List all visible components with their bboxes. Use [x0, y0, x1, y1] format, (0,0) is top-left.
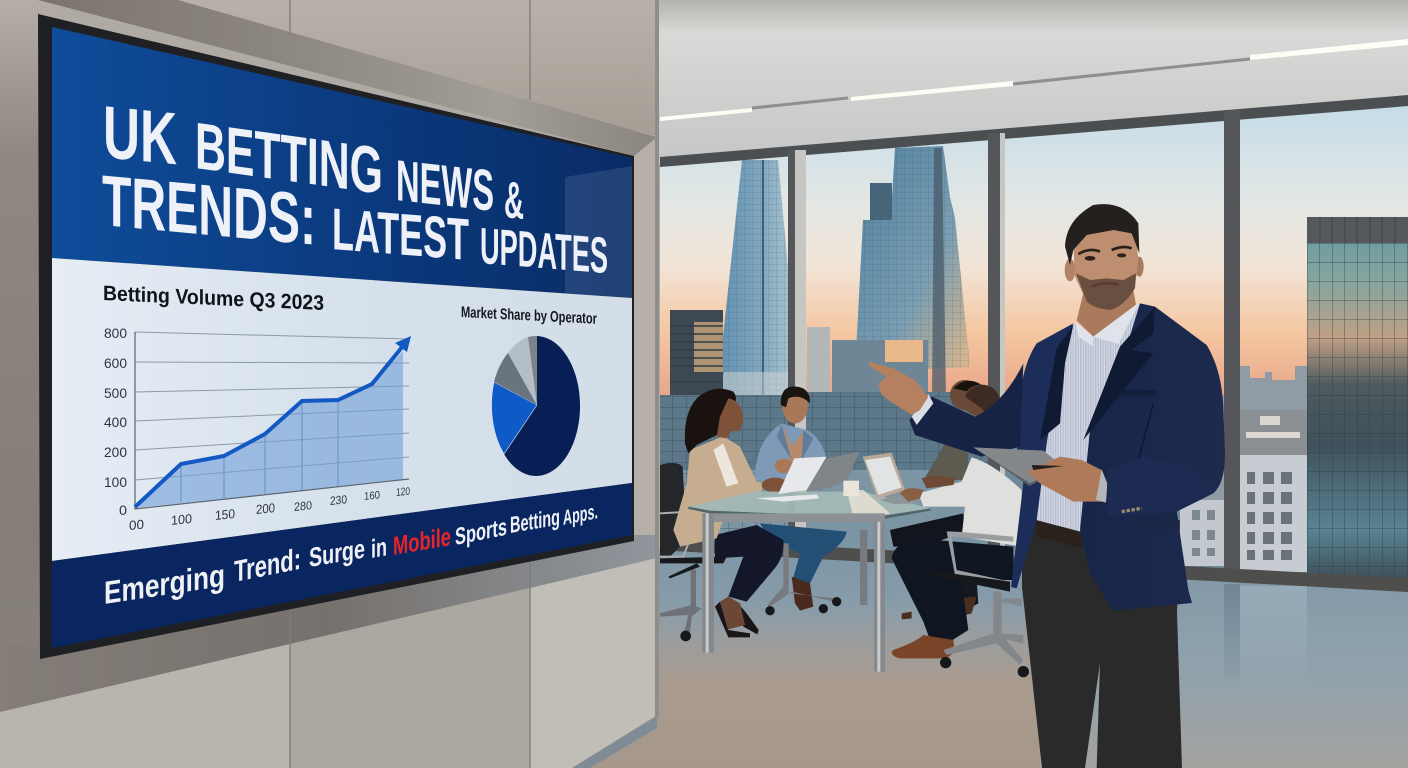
- title: NEWS: [396, 148, 494, 224]
- chart heading: betting volume: Betting Volume Q3 2023: [103, 282, 324, 315]
- mid-rise city blocks: [660, 392, 988, 480]
- far left wall in shadow: [0, 0, 60, 768]
- white building: [1240, 455, 1307, 572]
- office chair: left black: [660, 463, 727, 641]
- area under line: [135, 351, 403, 508]
- pointing arm: [909, 363, 1023, 457]
- arrow head: [395, 336, 411, 352]
- trend line: [135, 346, 403, 507]
- shirt: [1036, 303, 1155, 532]
- second woman seated: blue blazer: [755, 387, 847, 615]
- lower metal strip: [0, 535, 657, 712]
- ticker text: Apps.: [563, 500, 598, 530]
- x axis labels: 280: [294, 498, 312, 514]
- hand: [762, 478, 788, 492]
- x axis labels: 120: [396, 486, 410, 499]
- peach block and low glass front: [807, 327, 830, 397]
- ceiling: [640, 0, 1408, 165]
- document sheets: [755, 457, 827, 502]
- ticker band: [52, 483, 632, 648]
- chart area: [52, 258, 632, 561]
- chair base: [767, 543, 837, 607]
- hand with paper: [775, 459, 793, 473]
- line chart: betting volume: [104, 325, 411, 533]
- shirt cuff: [912, 394, 933, 425]
- ticker text: Trend:: [234, 543, 301, 589]
- laptop: grey open: [806, 452, 859, 491]
- ticker text: [104, 500, 598, 611]
- ticker text: Surge: [309, 533, 365, 573]
- distant haze buildings right: [1240, 366, 1307, 455]
- window frame mullions: [660, 95, 1408, 593]
- y axis labels: 800: [104, 325, 127, 341]
- lower panels: [0, 644, 290, 768]
- neck: [1077, 290, 1136, 337]
- title: LATEST: [332, 196, 469, 273]
- ticker text: Sports: [455, 514, 507, 551]
- blazer: [673, 436, 763, 547]
- presenter: [868, 204, 1225, 768]
- seated man upper body: [900, 385, 1022, 547]
- ticker text: Emerging: [104, 557, 225, 611]
- trousers: [715, 525, 784, 602]
- distant skyline: [660, 395, 1408, 590]
- pointing hand: [868, 362, 928, 415]
- right wall column: [630, 130, 657, 560]
- y axis labels: 600: [104, 355, 127, 371]
- upper metal strip: [38, 0, 657, 156]
- first woman seated: beige blazer: [673, 389, 788, 637]
- x axis labels: [129, 486, 410, 533]
- left wall with panels: [0, 0, 659, 768]
- x axis labels: 00: [129, 517, 144, 533]
- ticker text: Betting: [510, 504, 560, 538]
- meeting group at glass table: [660, 380, 1029, 677]
- lapels: [1040, 307, 1157, 440]
- x axis labels: 160: [364, 489, 380, 503]
- y axis labels: 0: [119, 502, 127, 518]
- right office chair: [927, 531, 1029, 677]
- y axis labels: 500: [104, 385, 127, 401]
- table legs back: [860, 530, 867, 605]
- jacket left front: [1011, 323, 1073, 588]
- window view: sky and city: [660, 100, 1408, 590]
- axes: [135, 332, 409, 509]
- title: UK: [103, 90, 177, 180]
- title band: [52, 27, 632, 298]
- tower: left glass spire: [716, 160, 793, 402]
- title: [102, 90, 608, 284]
- shoes: [715, 602, 759, 637]
- collar: [1075, 302, 1140, 347]
- watch: [1096, 469, 1107, 503]
- glass table: [688, 490, 931, 672]
- y axis labels: 100: [104, 474, 127, 490]
- ticker text: in: [371, 531, 387, 564]
- tall right glass building: [1307, 217, 1408, 581]
- chart heading: market share: Market Share by Operator: [461, 304, 597, 328]
- y axis labels: 400: [104, 414, 127, 430]
- x axis labels: 150: [215, 506, 235, 523]
- right arm seam: [1137, 403, 1153, 467]
- trousers: [1022, 520, 1182, 768]
- jacket right front and sleeve: [1080, 303, 1225, 611]
- ticker text: Mobile: [393, 521, 451, 561]
- belt: [1036, 520, 1082, 548]
- hair: [1065, 204, 1139, 265]
- title: TRENDS:: [102, 161, 316, 261]
- seated man in white shirt trousers: [892, 538, 1013, 658]
- holding hand: [1027, 457, 1105, 502]
- x axis labels: 200: [256, 500, 275, 517]
- tower: main glass skyscraper: [855, 146, 970, 400]
- hair: [685, 389, 736, 453]
- floor: [575, 550, 1408, 768]
- jacket sleeve end with buttons: [1107, 457, 1213, 517]
- ears: [1065, 259, 1075, 281]
- mouth: [1092, 283, 1118, 287]
- y axis labels: 200: [104, 444, 127, 460]
- eyes and brows: [1078, 247, 1132, 254]
- laptop: bright screen: [863, 453, 920, 504]
- pie chart: market share: [492, 336, 580, 476]
- title: &: [504, 171, 524, 231]
- x axis labels: 100: [171, 511, 192, 528]
- mug: [843, 481, 859, 496]
- upper wall panels: [178, 0, 658, 137]
- tablet: [973, 447, 1063, 483]
- beard: [1076, 273, 1136, 310]
- wall screen: [38, 14, 634, 659]
- face: [717, 398, 743, 438]
- face: [1073, 227, 1138, 310]
- third seated person behind: [890, 380, 982, 619]
- title: UPDATES: [480, 217, 608, 284]
- dark block building: [670, 310, 723, 395]
- pocket flap: [1128, 512, 1179, 532]
- screen bezel: [38, 14, 634, 659]
- x axis labels: 230: [330, 492, 347, 508]
- y axis labels: [104, 325, 127, 518]
- title: BETTING: [195, 109, 383, 209]
